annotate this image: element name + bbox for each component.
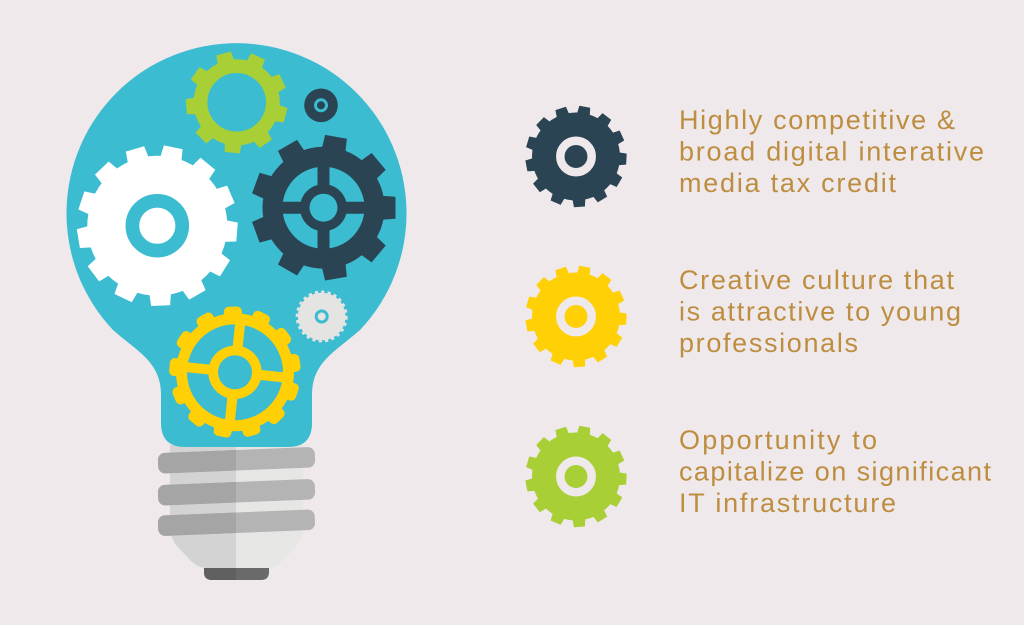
gear: green in bulb [186, 51, 288, 153]
text: creative culture [679, 265, 961, 358]
text: IT infrastructure: Opportunity to [679, 425, 877, 455]
text: tax credit: Highly competitive & [679, 105, 955, 135]
gear: large white [77, 145, 238, 306]
text: IT infrastructure: IT infrastructure [679, 488, 896, 518]
text: creative culture: is attractive to young [679, 296, 961, 326]
icon: green gear [525, 426, 627, 527]
bulb screw base [158, 445, 315, 580]
text: creative culture: professionals [679, 328, 858, 358]
icon: dark gear [525, 106, 627, 207]
text: tax credit: broad digital interative [679, 136, 984, 166]
icon: yellow gear [525, 266, 627, 367]
gear: yellow spoked [169, 306, 301, 438]
list item 3: green gear and text [525, 425, 991, 527]
gear: dark spoked [252, 135, 396, 281]
text: IT infrastructure: capitalize on significant [679, 456, 991, 486]
text: tax credit: media tax credit [679, 168, 896, 198]
list item 1: dark gear and text [525, 105, 984, 207]
bulb glass [66, 43, 406, 447]
list item 2: yellow gear and text [525, 265, 961, 367]
illustration: light bulb with gears [66, 43, 406, 580]
gear: small light grey [297, 292, 346, 341]
text: tax credit [679, 105, 984, 198]
text: creative culture: Creative culture that [679, 265, 954, 295]
text: IT infrastructure [679, 425, 991, 518]
gear: small dark disc [304, 88, 338, 122]
